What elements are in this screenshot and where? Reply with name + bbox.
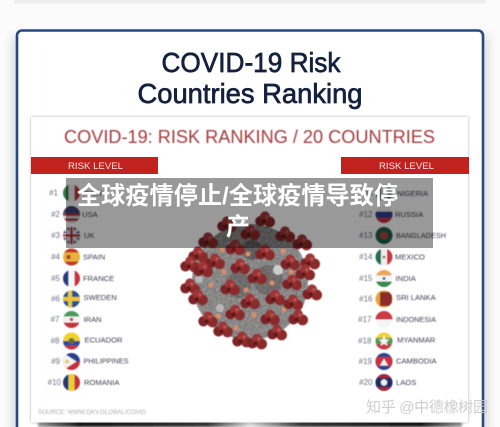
left ranking list: countries 1 to 10 <box>48 184 128 392</box>
left country names: ROMANIA <box>84 378 120 387</box>
left risk level banner: RISK LEVEL <box>68 161 123 172</box>
virus body <box>192 224 308 340</box>
caption text: 产 <box>226 214 250 241</box>
right rank numbers: #12 <box>359 210 373 219</box>
right country names: INDIA <box>396 274 417 283</box>
right rank numbers: #19 <box>359 357 373 366</box>
left rank numbers: #9 <box>51 357 61 366</box>
left country names <box>82 189 128 387</box>
rank 18 Myanmar <box>375 332 393 350</box>
orange protein dots <box>208 248 294 330</box>
rank 14 Mexico <box>375 248 393 266</box>
rank 4 Spain <box>62 248 80 266</box>
rank 20 Laos <box>375 374 393 392</box>
left country names: UK <box>84 231 95 240</box>
right country names: MEXICO <box>395 252 425 262</box>
left rank numbers <box>48 188 62 387</box>
right country names: INDONESIA <box>396 315 437 324</box>
left rank numbers: #2 <box>51 210 61 219</box>
right country names: SRI LANKA <box>396 293 437 302</box>
title: Countries Ranking <box>138 78 362 109</box>
right rank numbers: #14 <box>359 252 373 262</box>
right rank numbers: #20 <box>359 378 373 387</box>
panel heading: COVID-19: RISK RANKING / 20 COUNTRIES <box>64 127 435 147</box>
left country names: ITALY <box>83 189 103 198</box>
rank 5 France <box>62 270 80 288</box>
rank 6 Sweden <box>62 290 80 308</box>
right country names: NIGERIA <box>397 189 429 198</box>
inner panel <box>31 117 468 422</box>
right rank numbers: #17 <box>358 315 372 324</box>
rank 11 Nigeria <box>375 184 393 202</box>
right country names: BANGLADESH <box>396 231 446 240</box>
left country names: SPAIN <box>83 252 105 262</box>
rank 17 Indonesia <box>375 310 393 328</box>
left rank numbers: #4 <box>51 252 61 262</box>
left rank numbers: #7 <box>51 315 60 324</box>
right rank numbers: #15 <box>359 274 373 283</box>
right rank numbers: #18 <box>358 336 372 346</box>
source note: SOURCE: WWW.DKV.GLOBAL/COVID <box>38 409 146 416</box>
right country names: RUSSIA <box>395 210 424 219</box>
left country names: FRANCE <box>83 274 114 283</box>
right rank numbers: #11 <box>360 188 374 198</box>
right risk level banner <box>341 157 469 174</box>
left country names: PHILIPPINES <box>84 356 128 366</box>
left rank numbers: #5 <box>51 274 61 283</box>
rank 9 Philippines <box>62 352 80 370</box>
caption text: 全球疫情停止/全球疫情导致停 <box>77 183 398 210</box>
top page strip <box>14 0 486 4</box>
rank 7 Iran <box>62 310 80 328</box>
left country names: USA <box>82 210 99 219</box>
rank 19 Cambodia <box>375 352 393 370</box>
left rank numbers: #10 <box>48 378 62 387</box>
right rank numbers <box>358 188 374 387</box>
title <box>138 47 362 109</box>
right risk level banner: RISK LEVEL <box>379 161 434 172</box>
rank 3 UK <box>62 226 80 244</box>
rank 8 Ecuador <box>62 332 80 350</box>
left rank numbers: #6 <box>51 294 61 304</box>
left rank numbers: #8 <box>51 336 60 346</box>
rank 10 Romania <box>62 374 80 392</box>
left rank numbers: #3 <box>51 231 61 240</box>
left risk level banner <box>31 157 158 174</box>
right ranking list: countries 11 to 20 <box>358 184 446 392</box>
right rank numbers: #13 <box>359 231 373 240</box>
right country names: LAOS <box>396 378 416 387</box>
inner panel bottom shadow band <box>38 421 462 427</box>
rank 16 Sri Lanka <box>375 290 393 308</box>
right country names: MYANMAR <box>397 336 436 344</box>
right country names <box>395 189 446 387</box>
caption text <box>77 183 398 241</box>
rank 2 USA <box>62 206 80 224</box>
left country names: IRAN <box>84 315 102 324</box>
watermark: 知乎 @中德橡树园 <box>366 398 488 416</box>
left country names: SWEDEN <box>84 293 117 302</box>
left rank numbers: #1 <box>49 188 59 198</box>
right country names: CAMBODIA <box>396 356 437 366</box>
title: COVID-19 Risk <box>162 47 341 78</box>
right rank numbers: #16 <box>359 294 373 304</box>
gray caption overlay <box>66 178 433 248</box>
rank 13 Bangladesh <box>375 226 393 244</box>
spike proteins <box>180 211 322 349</box>
rank 15 India <box>375 270 393 288</box>
rank 1 Italy <box>62 184 80 202</box>
left country names: ECUADOR <box>84 336 123 344</box>
rank 12 Russia <box>375 206 393 224</box>
illustration: coronavirus <box>180 211 322 349</box>
